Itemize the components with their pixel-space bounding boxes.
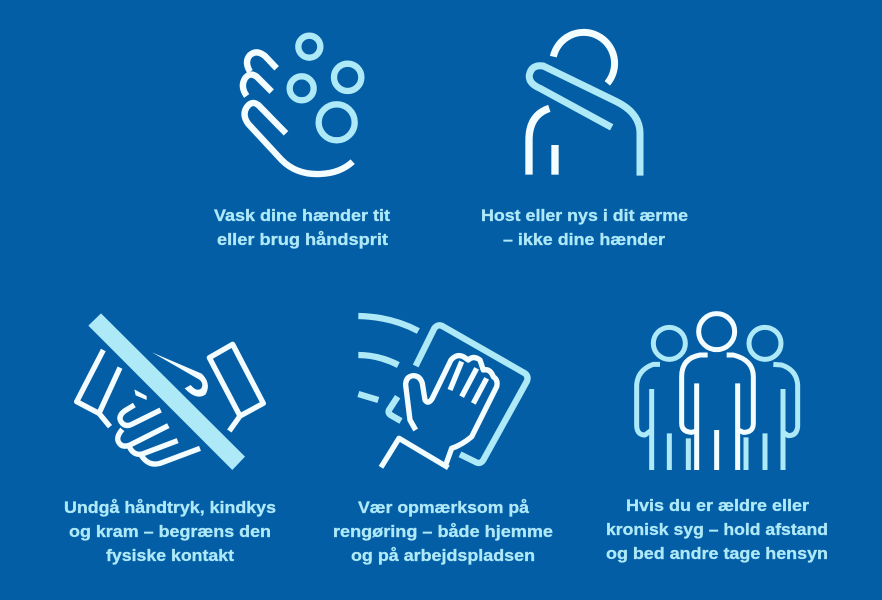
caption: cleaning: rengøring – både hjemme [333,522,553,541]
icon: group of people [637,314,798,470]
icon: no handshake [77,313,263,470]
caption: avoid handshakes: og kram – begræns den [69,522,271,541]
caption: avoid handshakes: Undgå håndtryk, kindkys [64,498,276,517]
caption: elderly and chronically ill: og bed andre tage hensyn [606,544,828,563]
caption: elderly and chronically ill: Hvis du er ældre eller [626,496,809,515]
caption: elderly and chronically ill [606,496,828,563]
icon: washing hands [243,36,361,174]
caption: wash hands: eller brug håndsprit [217,230,388,249]
caption: cough in sleeve: Host eller nys i dit ærme [481,206,688,225]
caption: avoid handshakes: fysiske kontakt [106,546,234,565]
caption: cough in sleeve [481,206,688,249]
caption: cough in sleeve: – ikke dine hænder [503,230,665,249]
caption: wash hands: Vask dine hænder tit [214,206,390,225]
caption: elderly and chronically ill: kronisk syg – hold afstand [606,520,828,539]
caption: cleaning [333,498,553,565]
icon: hand cleaning with cloth [358,316,528,468]
caption: cleaning: Vær opmærksom på [358,498,530,517]
caption: avoid handshakes [64,498,276,565]
icon: cough into sleeve [529,32,640,176]
caption: cleaning: og på arbejdspladsen [351,546,535,565]
caption: wash hands [214,206,390,249]
